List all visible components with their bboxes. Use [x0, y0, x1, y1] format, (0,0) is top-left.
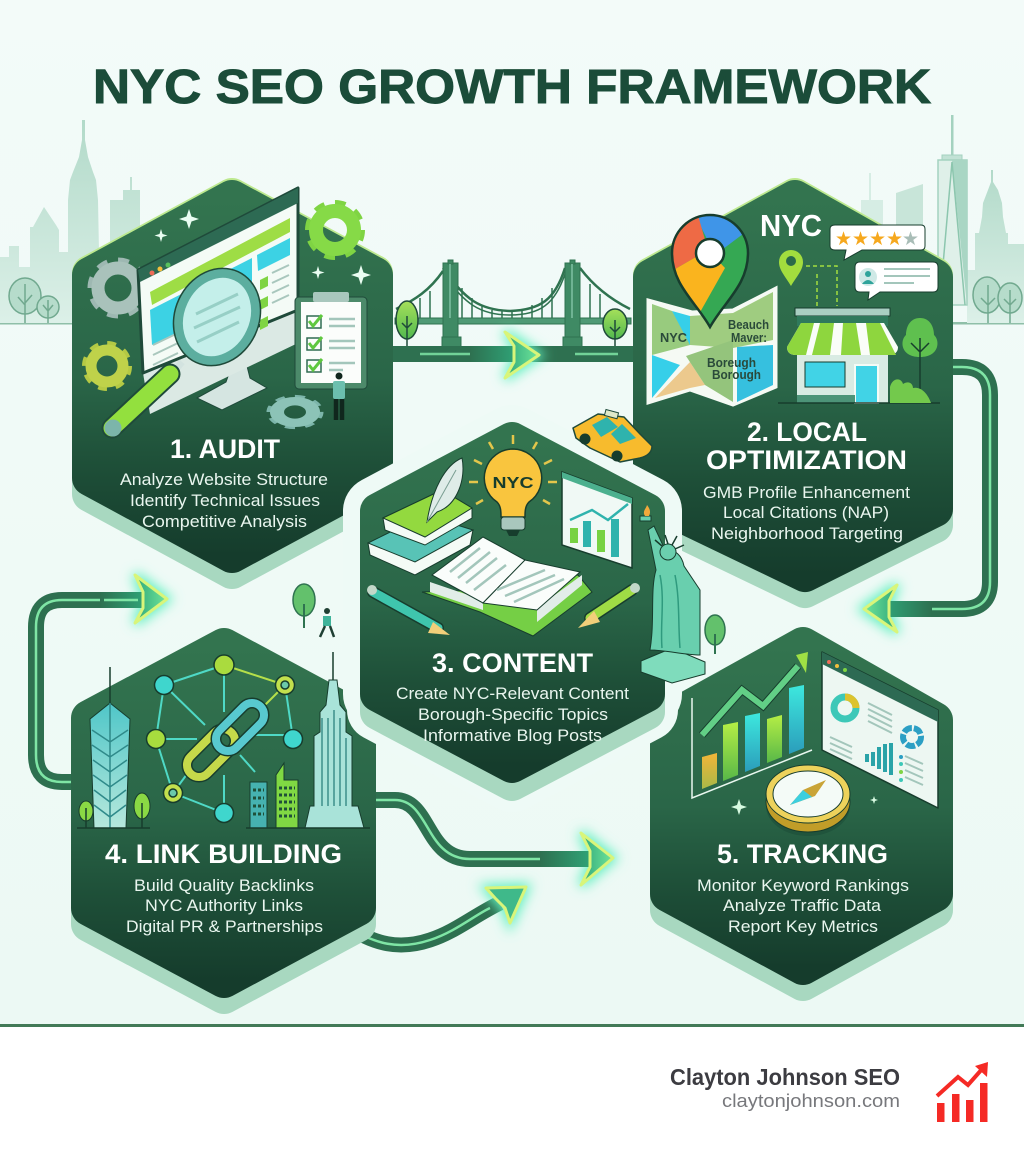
left skyline: [0, 120, 140, 324]
icon: bright green gear: [310, 205, 360, 255]
heading: local optimization: 2. LOCAL: [747, 417, 867, 447]
bar chart: [692, 685, 812, 798]
icon: dashboard panel: [822, 652, 938, 808]
text: content items: Create NYC-Relevant Content: [396, 684, 629, 703]
text: audit items: Competitive Analysis: [142, 512, 307, 531]
icon: chain links: [182, 698, 269, 782]
text: map labels: Borough: [712, 368, 761, 382]
text: brand url: claytonjohnson.com: [722, 1090, 900, 1111]
icon: small person: [333, 372, 345, 420]
icon: magnifying glass: [104, 254, 276, 436]
panel: 3. content: [367, 435, 647, 783]
icon: statue of liberty: [640, 505, 705, 683]
icon: grey gear: [92, 262, 144, 314]
icon: feather quill: [427, 458, 463, 522]
text: audit items: [120, 470, 328, 531]
icon: computer monitor: [138, 188, 298, 414]
icon: chart panel: [562, 472, 632, 568]
text: map labels: Maver:: [731, 331, 767, 345]
text: content items: Informative Blog Posts: [423, 726, 602, 745]
icon: rating bubble: ★: [902, 228, 919, 250]
decorative park tree and walker: [293, 584, 334, 637]
panel: 5. tracking: [668, 645, 938, 983]
icon: map pin: [670, 214, 750, 330]
heading: audit: 1. AUDIT: [170, 434, 280, 464]
icon: tree and bush: [890, 318, 937, 403]
icon: empire state building: [246, 652, 370, 828]
text: link building items: NYC Authority Links: [145, 896, 303, 915]
heading: content: 3. CONTENT: [432, 648, 593, 678]
text: tracking items: Monitor Keyword Rankings: [697, 876, 909, 895]
arrow: link building to tracking lower: [345, 887, 526, 945]
icon: link network: [146, 655, 302, 822]
arrow: local optimization to content: [863, 367, 990, 632]
panel: 1. audit: [86, 188, 375, 571]
arrow: audit to local optimization: [390, 332, 634, 378]
text: local optimization items: [703, 483, 910, 543]
text: link building items: [126, 876, 323, 936]
icon: teal pencil: [367, 585, 450, 635]
icon: one world trade tower: [90, 667, 130, 828]
icon: storefront: [778, 308, 940, 403]
text: link building items: Build Quality Backlinks: [134, 876, 314, 895]
heading: tracking: 5. TRACKING: [717, 839, 888, 869]
icon: small buildings: [250, 763, 298, 828]
heading: local optimization: OPTIMIZATION: [706, 445, 907, 475]
right skyline: [861, 115, 1024, 324]
text: local optimization items: Neighborhood Targeting: [711, 524, 903, 543]
arrow: growth trend: [702, 652, 808, 735]
icon: sparkles: [154, 209, 371, 285]
text: map labels: Beauch: [728, 318, 769, 332]
text: audit items: Identify Technical Issues: [130, 491, 320, 510]
panel: 2. local optimization: [648, 196, 940, 590]
text: tracking items: [697, 876, 909, 936]
icon: open book: [422, 537, 592, 636]
icon: park tree near tracking: [705, 615, 725, 654]
arrow: link building to tracking upper: [372, 800, 613, 885]
arrow: link building to audit: [36, 575, 167, 782]
text: content items: [396, 684, 629, 745]
panel: 4. link building: [77, 646, 370, 996]
icon: sparkles: [731, 796, 878, 815]
icon: suspension bridge: [395, 260, 631, 347]
text: local optimization items: GMB Profile Enhancement: [703, 483, 910, 502]
text: tracking items: Report Key Metrics: [728, 917, 878, 936]
text: audit items: Analyze Website Structure: [120, 470, 328, 489]
icon: olive gear: [86, 345, 128, 387]
footer band: [0, 1024, 1024, 1154]
text: brand name: Clayton Johnson SEO: [670, 1064, 900, 1090]
icon: rating bubble: ★★★★: [835, 228, 903, 250]
icon: light bulb: NYC: [492, 475, 534, 492]
icon: small green pin: [779, 250, 837, 306]
icon: checklist clipboard: [295, 292, 367, 389]
icon: stacked books: [368, 490, 473, 575]
heading: link building: 4. LINK BUILDING: [105, 839, 342, 869]
text: link building items: Digital PR & Partnerships: [126, 917, 323, 936]
icon: red growth logo: [937, 1062, 988, 1122]
icon: rating bubble: [830, 225, 925, 260]
icon: review bubble: [855, 262, 938, 300]
text: local optimization items: Local Citations (NAP): [723, 503, 889, 522]
text: map labels: [660, 318, 769, 382]
heading: local optimization: [706, 417, 907, 475]
text: content items: Borough-Specific Topics: [418, 705, 608, 724]
icon: light bulb: [469, 435, 557, 536]
title: NYC SEO GROWTH FRAMEWORK: [93, 61, 931, 114]
icon: green pencil: [578, 583, 640, 628]
text: map labels: NYC: [660, 331, 687, 345]
icon: folded map: [648, 288, 776, 405]
label: nyc: NYC: [760, 208, 822, 243]
text: tracking items: Analyze Traffic Data: [723, 896, 882, 915]
icon: trees beside tower: [77, 793, 150, 828]
text: map labels: Boreugh: [707, 356, 756, 370]
icon: yellow taxi: [573, 410, 652, 462]
icon: compass: [766, 765, 850, 836]
icon: teal gear: [271, 398, 319, 426]
